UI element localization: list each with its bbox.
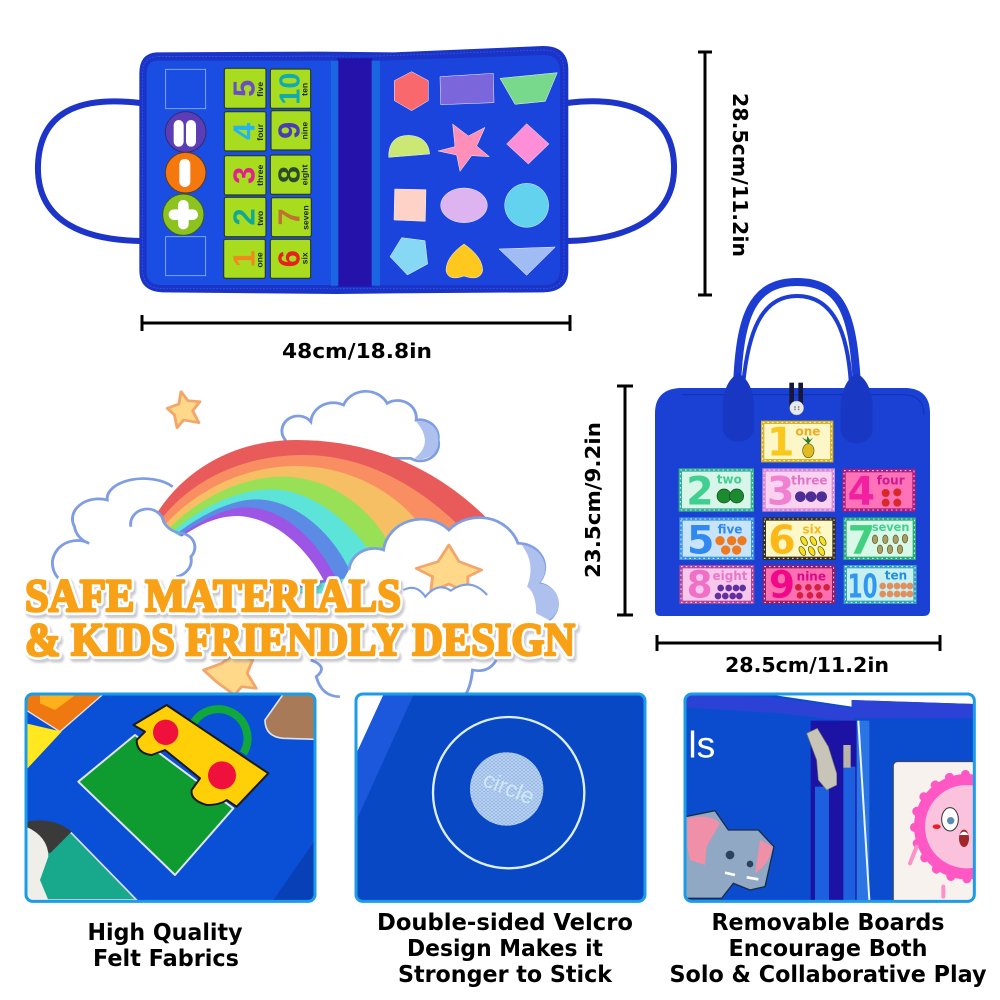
- closure strap and button: [789, 383, 804, 415]
- front cloud right: [274, 518, 559, 700]
- caption: removable boards: Encourage Both: [728, 936, 928, 962]
- closed bag product: [655, 282, 930, 616]
- rainbow and clouds illustration: [52, 391, 559, 700]
- number tiles: 10: [274, 73, 306, 105]
- dimension label: 23.5cm/9.2in: [581, 422, 605, 578]
- zipper right tape: [843, 767, 855, 902]
- velcro dot: [470, 752, 543, 826]
- number tiles: 9: [272, 122, 306, 139]
- card: three: 3: [767, 468, 794, 514]
- back cloud top: [282, 391, 439, 461]
- card: seven: seven: [872, 520, 909, 534]
- red buttons: [153, 720, 236, 789]
- card: four: four: [877, 474, 905, 488]
- card: eight: eight: [712, 569, 748, 583]
- number tiles: nine: [300, 122, 310, 140]
- photo background: [356, 694, 645, 901]
- dimension bar: [142, 315, 570, 331]
- title orange lettering: SAFE MATERIALS: [25, 570, 401, 622]
- dimension: 28.5cm height: [698, 52, 752, 295]
- caption: velcro: Design Makes it: [407, 936, 603, 962]
- cloud scallop under star: [403, 585, 487, 613]
- pink monster: [908, 770, 973, 899]
- left page: [147, 61, 332, 285]
- dimension: 48cm width: [142, 315, 570, 363]
- photo panel: velcro circle: [356, 694, 645, 901]
- number tiles: [224, 68, 311, 278]
- card: one: 1: [767, 420, 794, 466]
- dimension label: 28.5cm/11.2in: [725, 653, 889, 677]
- felt strap: [357, 695, 413, 818]
- front cloud left: [93, 509, 195, 587]
- bag handle tabs: [723, 373, 873, 443]
- white corner: [357, 695, 383, 752]
- zipper dark spine: [811, 721, 857, 902]
- card: seven: 7: [848, 517, 875, 563]
- operator: minus: [165, 152, 206, 193]
- top-left felt pieces: [26, 694, 103, 770]
- card: eight: [679, 562, 754, 606]
- photo border: [356, 694, 645, 901]
- card: two: two: [717, 472, 742, 486]
- brown felt piece: [265, 694, 315, 739]
- number tiles: 8: [272, 166, 306, 183]
- bag felt body: [655, 388, 930, 616]
- rainbow arcs: [153, 440, 485, 593]
- small star top: [167, 392, 200, 428]
- photo background: [26, 694, 315, 901]
- green ring: [193, 709, 247, 753]
- lower cloud outline: [311, 660, 496, 700]
- title white halo: SAFE MATERIALS: [25, 570, 401, 622]
- monster card: [892, 761, 973, 900]
- number tiles: 4: [228, 123, 262, 140]
- caption: removable boards: [670, 910, 987, 988]
- white line: [858, 721, 869, 900]
- card: eight: 8: [687, 562, 713, 606]
- card: five: [679, 517, 754, 563]
- number tiles: four: [255, 123, 265, 141]
- number tiles: 7: [272, 208, 306, 226]
- card: three: [762, 468, 835, 514]
- card: six: six: [803, 523, 822, 537]
- dimension bar: [657, 635, 940, 651]
- number tiles: 6: [272, 250, 306, 267]
- card dashed trims: [680, 422, 915, 602]
- zipper spine: [337, 58, 372, 287]
- title orange lettering: & KIDS FRIENDLY DESIGN: [25, 614, 575, 666]
- title: [25, 570, 575, 666]
- bottom-left felt piece: [26, 820, 137, 900]
- dimension: 23.5cm bag height: [581, 386, 633, 615]
- dimension: 28.5cm bag width: [657, 635, 940, 677]
- caption: velcro: [377, 910, 633, 988]
- title white halo: & KIDS FRIENDLY DESIGN: [25, 614, 575, 666]
- card: one: [761, 420, 833, 466]
- card: four: [842, 468, 916, 514]
- number tiles: 3: [228, 167, 262, 184]
- back cloud left: [52, 479, 236, 583]
- white top wedge: [777, 696, 973, 707]
- number tiles: 2: [228, 208, 262, 226]
- caption: velcro: Double-sided Velcro: [377, 910, 633, 936]
- open busy board product: [38, 46, 674, 294]
- board handles: [38, 101, 674, 241]
- large star: [416, 545, 482, 593]
- zipper left tape: [815, 787, 829, 902]
- yellow clasp: [133, 705, 268, 807]
- dimension label: 48cm/18.8in: [282, 339, 432, 363]
- dimension bar: [698, 52, 712, 295]
- card: nine: 9: [769, 562, 795, 606]
- photo border: [26, 694, 315, 901]
- caption: felt fabrics: High Quality: [88, 920, 242, 946]
- number tiles: eight: [300, 165, 310, 185]
- operator: plus: [163, 194, 204, 235]
- dimension label: 28.5cm/11.2in: [728, 93, 752, 257]
- board body and contents: [139, 46, 568, 294]
- photo panel: felt fabric: [26, 694, 315, 901]
- card: nine: nine: [797, 570, 826, 584]
- card: ten: ten: [885, 568, 907, 582]
- green felt square: [78, 735, 233, 875]
- card: ten: [844, 565, 917, 605]
- card: ten: 10: [848, 566, 878, 605]
- number tiles: 1: [228, 250, 262, 267]
- empty squares: [166, 69, 206, 276]
- number tiles: seven: [300, 205, 310, 230]
- light strip: [857, 721, 869, 902]
- card: three: three: [791, 473, 828, 487]
- caption: felt fabrics: [88, 920, 242, 972]
- card: two: [679, 468, 754, 514]
- card: six: 6: [768, 517, 796, 563]
- photo background: [685, 694, 974, 901]
- card: one: one: [796, 424, 820, 438]
- board felt cover: [139, 46, 568, 294]
- cloud scallop stroke: [403, 585, 487, 597]
- title white halo: [25, 570, 575, 666]
- printed circle: [433, 717, 584, 868]
- felt shapes: [389, 72, 557, 278]
- bag stitching: [682, 395, 924, 415]
- dimension bar: [617, 386, 633, 615]
- number tiles: three: [255, 165, 265, 186]
- text fragment: ls: [688, 724, 715, 766]
- bag handles: [737, 282, 857, 385]
- board stitching: [143, 50, 564, 289]
- elephant: [685, 811, 774, 898]
- strap bottom right: [273, 840, 315, 900]
- card: two: 2: [686, 468, 714, 514]
- card: seven: [843, 517, 916, 563]
- caption: felt fabrics: Felt Fabrics: [93, 946, 239, 972]
- number tiles: ten: [300, 83, 310, 96]
- velcro dot: circle: [480, 766, 538, 810]
- top felt band: [685, 695, 975, 722]
- operator: equals: [165, 112, 206, 152]
- zipper strips: [331, 61, 380, 286]
- title orange lettering: [25, 570, 575, 666]
- number tiles: five: [255, 82, 265, 97]
- photo panel: removable boards: [685, 694, 1000, 908]
- lower star: [204, 653, 256, 695]
- photo border: [685, 694, 974, 901]
- number tiles: six: [300, 252, 310, 264]
- right page: [380, 55, 560, 285]
- card: four: 4: [848, 468, 875, 514]
- zipper slider: [807, 728, 851, 790]
- bag body and cards: [655, 373, 930, 616]
- caption: removable boards: Solo & Collaborative Play: [670, 962, 987, 988]
- number tiles: two: [255, 211, 265, 226]
- caption: velcro: Stronger to Stick: [398, 962, 613, 988]
- card: five: 5: [687, 517, 714, 563]
- caption: removable boards: Removable Boards: [712, 910, 944, 936]
- card: five: five: [718, 522, 742, 536]
- number tiles: one: [254, 252, 264, 268]
- number tiles: 5: [228, 80, 262, 97]
- card: six: [763, 517, 836, 563]
- card: nine: [763, 562, 835, 606]
